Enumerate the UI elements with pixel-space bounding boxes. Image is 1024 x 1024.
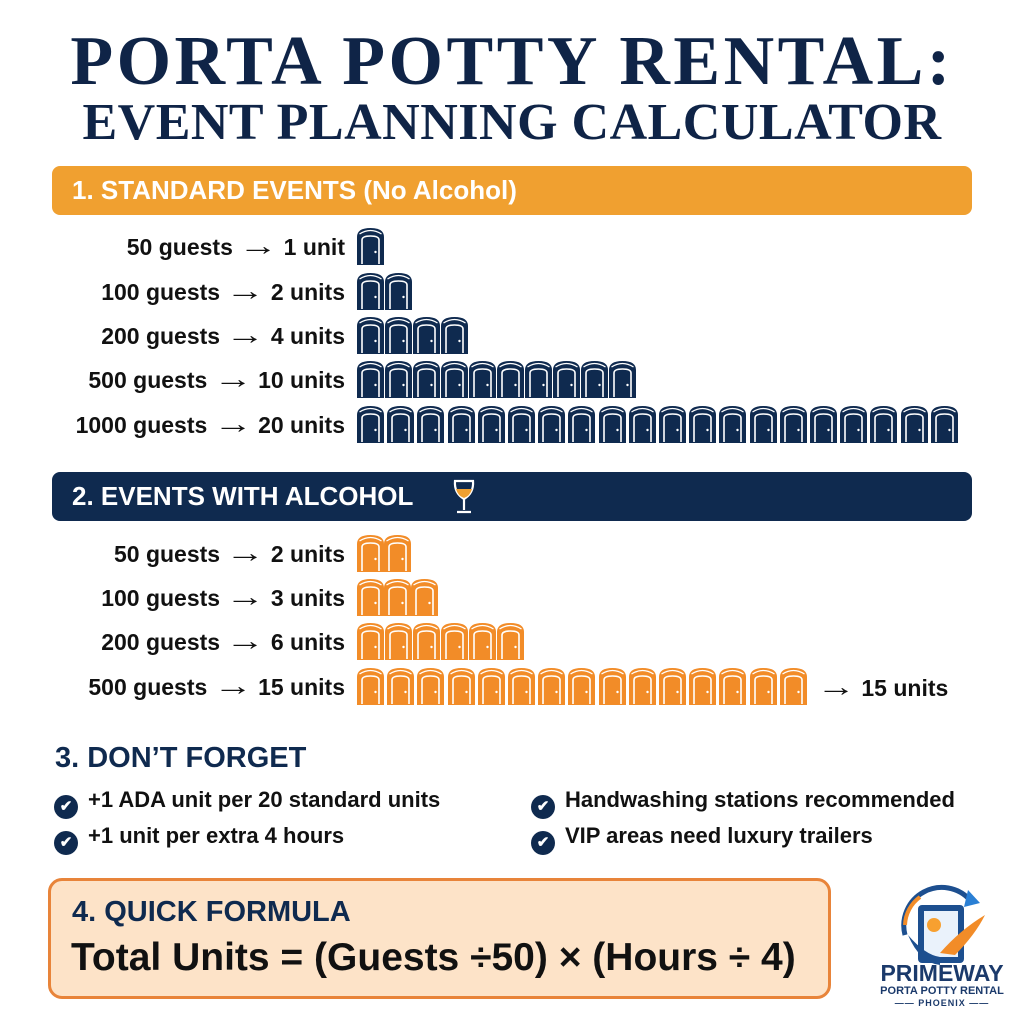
logo — [880, 884, 1004, 1008]
standard labels: → — [226, 319, 265, 350]
checklist: ✔ — [537, 834, 549, 851]
standard labels: 100 guests 2 units — [101, 279, 345, 305]
checklist: Handwashing stations recommended — [565, 787, 955, 812]
checklist: ✔ — [60, 798, 72, 815]
standard labels: → — [213, 363, 252, 394]
panel: quick formula: 4. QUICK FORMULA — [72, 896, 351, 928]
alcohol labels — [88, 537, 345, 701]
alcohol labels: → — [226, 625, 265, 656]
checklist: ✔ — [60, 834, 72, 851]
standard labels: 500 guests 10 units — [88, 367, 345, 393]
standard labels: 1000 guests 20 units — [76, 412, 345, 438]
section header: standard events: 1. STANDARD EVENTS (No Alcohol) — [72, 175, 517, 205]
icon rows: porta potties — [357, 228, 958, 705]
alcohol labels: → — [226, 537, 265, 568]
alcohol labels: 200 guests 6 units — [101, 629, 345, 655]
section header: alcohol — [52, 472, 972, 521]
checklist — [54, 787, 955, 855]
alcohol labels: 50 guests 2 units — [114, 541, 345, 567]
logo: PRIMEWAY — [880, 960, 1004, 986]
title — [70, 23, 954, 151]
extra label: → — [816, 671, 856, 702]
section header: alcohol: 2. EVENTS WITH ALCOHOL — [72, 481, 413, 511]
extra label — [816, 671, 948, 702]
title: EVENT PLANNING CALCULATOR — [82, 94, 942, 151]
standard labels: → — [239, 230, 278, 261]
alcohol labels: → — [213, 670, 252, 701]
alcohol labels: 500 guests 15 units — [88, 674, 345, 700]
alcohol labels: 100 guests 3 units — [101, 585, 345, 611]
standard labels: → — [213, 408, 252, 439]
alcohol labels: → — [226, 581, 265, 612]
standard labels: → — [226, 275, 265, 306]
title: PORTA POTTY RENTAL: — [70, 23, 954, 100]
section header: standard events — [52, 166, 972, 215]
panel: quick formula: Total Units = (Guests ÷50) × (Hours ÷ 4) — [71, 936, 796, 979]
standard labels — [76, 230, 345, 439]
logo: PORTA POTTY RENTAL — [880, 985, 1004, 997]
panel: quick formula — [48, 878, 831, 999]
icon: wine glass — [454, 480, 474, 514]
standard labels: 200 guests 4 units — [101, 323, 345, 349]
checklist: ✔ — [537, 798, 549, 815]
logo: —— PHOENIX —— — [895, 998, 989, 1008]
checklist: +1 unit per extra 4 hours — [88, 823, 344, 848]
checklist: VIP areas need luxury trailers — [565, 823, 873, 848]
extra label: 15 units — [861, 675, 948, 701]
checklist: +1 ADA unit per 20 standard units — [88, 787, 440, 812]
heading: don't forget: 3. DON’T FORGET — [55, 742, 306, 774]
standard labels: 50 guests 1 unit — [127, 234, 345, 260]
